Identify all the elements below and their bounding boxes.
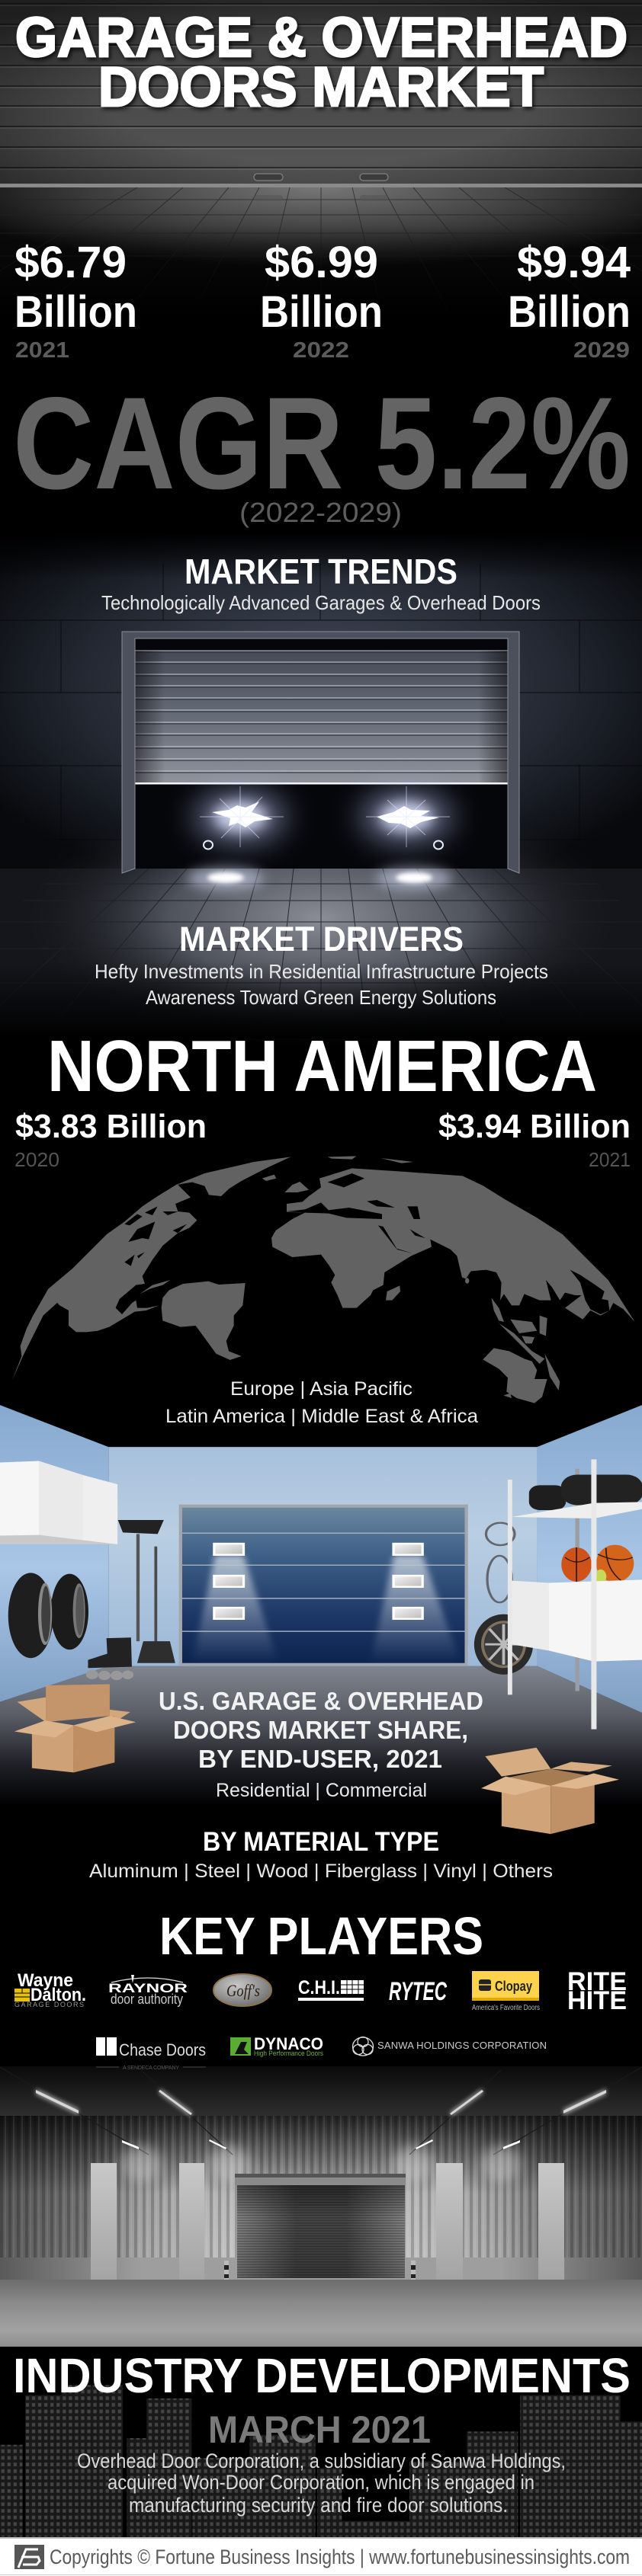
logo: Wayne Dalton: Dalton.	[30, 1985, 86, 2005]
roller shutter door	[235, 2174, 406, 2278]
pillars	[91, 2163, 564, 2280]
logo: Sanwa Holdings: SANWA HOLDINGS CORPORATION	[377, 2040, 547, 2051]
CAGR heading: (2022-2029)	[239, 497, 402, 528]
heading: U.S. market share by end-user	[159, 1687, 483, 1801]
stat: 2022 market size: $6.99	[265, 238, 378, 287]
panel: warehouse illustration	[0, 2066, 642, 2347]
logo: Rite-Hite: RITE	[567, 1967, 627, 1996]
title	[15, 7, 628, 118]
stat: 2021 market size: $6.79	[14, 238, 127, 287]
stat: 2022 market size: 2022	[293, 338, 349, 363]
logo: Wayne Dalton: Wayne	[18, 1970, 73, 1991]
floor	[0, 1666, 642, 1806]
wall	[0, 533, 642, 872]
logo: C.H.I.: C.H.I.	[298, 1977, 340, 1998]
region heading: North America: $3.94 Billion	[438, 1108, 631, 1145]
logo: Dynaco: DYNACO	[254, 2034, 323, 2053]
region list: Europe | Asia Pacific	[230, 1378, 412, 1400]
heading: market trends: Technologically Advanced Garages & Overhead Doors	[101, 591, 541, 614]
logo: C.H.I.	[298, 1977, 364, 2001]
storage rack	[508, 1459, 642, 1730]
region heading: North America: 2020	[14, 1148, 59, 1171]
ceiling	[0, 2066, 642, 2116]
hanging tyres	[8, 1573, 88, 1658]
corrugated wall	[0, 2116, 642, 2280]
logo: Clopay: Clopay	[495, 1979, 532, 1994]
stat: 2029 market size: $9.94	[517, 238, 631, 287]
logo: Dynaco: High Performance Doors	[254, 2050, 323, 2057]
logo: Wayne Dalton: GARAGE DOORS	[14, 2001, 84, 2008]
title: DOORS MARKET	[98, 56, 544, 118]
logo: Rite-Hite: HITE	[567, 1986, 627, 2015]
panel: hero garage door	[0, 0, 642, 318]
heading: market drivers: Hefty Investments in Residential Infrastructure Projects	[95, 960, 548, 983]
region heading: North America: $3.83 Billion	[15, 1108, 207, 1145]
spare wheel	[474, 1614, 533, 1675]
panel: garage interior illustration	[0, 1405, 642, 1834]
world map globe	[12, 1156, 635, 1403]
headlights	[188, 786, 452, 890]
floor tiles	[0, 789, 642, 1048]
concrete floor	[0, 2280, 642, 2347]
region list	[165, 1378, 478, 1427]
heading: U.S. market share by end-user: U.S. GARAGE & OVERHEAD	[159, 1687, 483, 1715]
logo: Goff's	[213, 1974, 271, 2006]
title: GARAGE & OVERHEAD	[15, 7, 628, 69]
logo: Chase Doors	[96, 2037, 206, 2059]
heading: market trends: MARKET TRENDS	[185, 552, 457, 591]
heading: market drivers: MARKET DRIVERS	[179, 920, 464, 958]
region heading: North America	[14, 1026, 631, 1171]
stat: 2029 market size: Billion	[508, 287, 631, 337]
label: Chase Doors parent company: A SENDECA COMPANY	[123, 2066, 179, 2071]
side walls	[0, 1405, 642, 1713]
heading: U.S. market share by end-user: DOORS MARKET SHARE,	[173, 1716, 468, 1744]
stat: 2029 market size: 2029	[573, 338, 630, 363]
door frame	[122, 632, 519, 873]
heading: market drivers	[95, 920, 548, 1009]
footer	[0, 2537, 642, 2576]
logo: Raynor: door authority	[111, 1992, 183, 2007]
region list: Latin America | Middle East & Africa	[165, 1406, 478, 1427]
heading: by material type: Aluminum | Steel | Wood | Fiberglass | Vinyl | Others	[89, 1861, 553, 1882]
panel: industry developments: MARCH 2021	[208, 2408, 431, 2451]
heading: U.S. market share by end-user: Residential | Commercial	[216, 1780, 427, 1801]
stat: 2022 market size: Billion	[260, 287, 383, 337]
inline skate	[86, 1637, 133, 1680]
stat: 2021 market size	[14, 238, 137, 363]
cardboard box left	[14, 1684, 136, 1772]
city skyline	[0, 2385, 642, 2537]
blue sectional door	[179, 1505, 468, 1666]
logo: Raynor	[108, 1975, 188, 2007]
rolling shutter	[135, 638, 508, 869]
tiled floor	[0, 187, 642, 318]
heading: market drivers: Awareness Toward Green Energy Solutions	[146, 986, 496, 1009]
panel: industry developments: Overhead Door Corporation, a subsidiary of Sanwa Holdings,	[77, 2450, 566, 2472]
panel: industry developments	[0, 2347, 642, 2537]
panel: industry developments: acquired Won-Door Corporation, which is engaged in	[108, 2471, 534, 2494]
logo: Rytec: RYTEC	[389, 1977, 447, 2006]
logo: Wayne Dalton	[14, 1970, 86, 2008]
panel: market trends illustration	[0, 533, 642, 1048]
heading: U.S. market share by end-user: BY END-USER, 2021	[198, 1745, 442, 1773]
logo: Sanwa Holdings	[352, 2037, 547, 2056]
logo: Rite-Hite	[567, 1967, 627, 2015]
cardboard box right	[481, 1748, 619, 1834]
stat: 2029 market size	[508, 238, 631, 363]
heading: market trends	[101, 552, 541, 614]
heading: by material type: BY MATERIAL TYPE	[203, 1827, 439, 1857]
heading: key players: KEY PLAYERS	[159, 1906, 483, 1966]
stat: 2021 market size: 2021	[15, 338, 69, 363]
stat: 2022 market size	[260, 238, 383, 363]
wall cabinets	[0, 1461, 117, 1544]
region heading: North America: 2021	[589, 1148, 631, 1171]
logo: Clopay	[472, 1971, 540, 2012]
door handles	[254, 174, 388, 181]
logo: Clopay: America's Favorite Doors	[472, 2004, 540, 2012]
garage door background	[0, 0, 642, 187]
back wall	[108, 1447, 538, 1666]
ceiling lights	[0, 2067, 642, 2182]
rope coils	[486, 1523, 515, 1602]
logo: Dynaco	[230, 2034, 323, 2057]
brooms	[118, 1520, 175, 1663]
logo: Chase Doors: Chase Doors	[119, 2040, 206, 2059]
heading: by material type	[89, 1827, 553, 1882]
panel: industry developments: manufacturing security and fire door solutions.	[129, 2494, 508, 2517]
stat: 2021 market size: Billion	[14, 287, 137, 337]
logo: Goff's: Goff's	[226, 1981, 260, 2000]
bollards	[224, 2261, 416, 2282]
logo: Raynor: RAYNOR	[108, 1981, 188, 1995]
footer logo	[14, 2545, 44, 2569]
